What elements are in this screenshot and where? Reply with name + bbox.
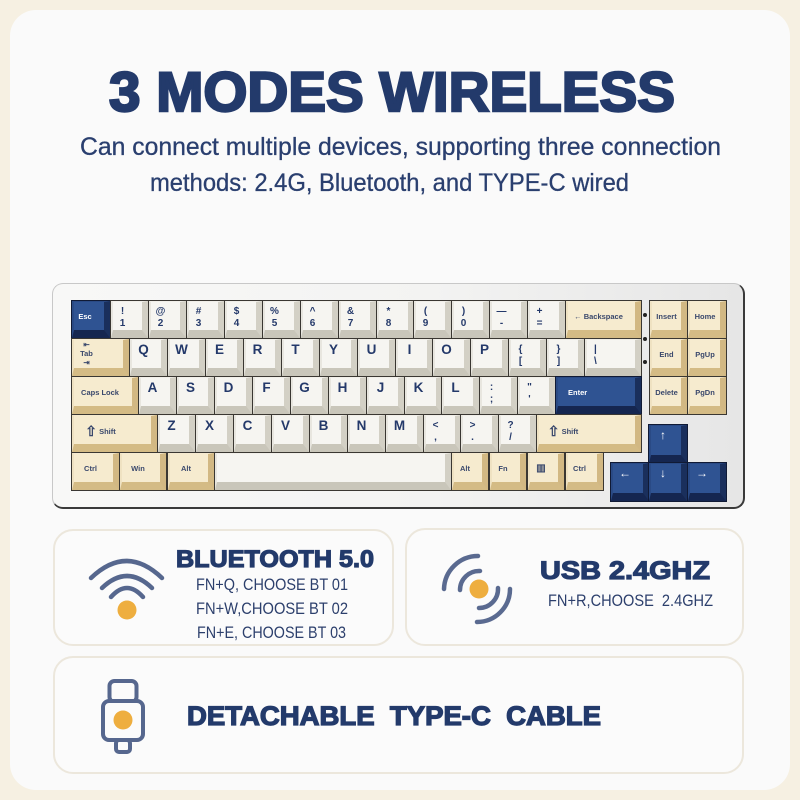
navigation key cluster: End	[659, 350, 674, 359]
key row: number row: %	[270, 306, 279, 317]
key row: ASDF: L	[451, 380, 460, 395]
key row: number row: $	[234, 306, 239, 317]
navigation key cluster	[649, 300, 727, 415]
key row: QWERTY: E	[215, 342, 224, 357]
arrow key cluster: →	[696, 466, 708, 480]
key row: ZXCV: >	[470, 420, 475, 431]
key row: number row: 6	[310, 318, 315, 329]
key row: ZXCV: /	[509, 432, 512, 443]
key row: ASDF: S	[186, 380, 195, 395]
subtitle text	[80, 133, 721, 197]
key row: number row: 8	[386, 318, 391, 329]
key row: number row: @	[156, 306, 165, 317]
Bluetooth text block: FN+Q, CHOOSE BT 01	[196, 575, 348, 594]
key row: QWERTY: R	[253, 342, 262, 357]
key row: number row: -	[500, 318, 503, 329]
key row: ZXCV	[71, 414, 642, 453]
key row: bottom row: Alt	[181, 464, 191, 473]
arrow key cluster: ↓	[660, 466, 666, 480]
key row: QWERTY: I	[408, 342, 411, 357]
key row: ZXCV: ?	[507, 420, 514, 431]
key row: number row	[71, 300, 642, 338]
key row: ASDF: A	[148, 380, 157, 395]
key row: ASDF: F	[262, 380, 271, 395]
arrow key cluster: ↑	[660, 428, 666, 442]
key row: number row: 1	[120, 318, 125, 329]
key row: ASDF: G	[299, 380, 310, 395]
key row: QWERTY: {	[519, 344, 522, 355]
key row: QWERTY: T	[291, 342, 300, 357]
key row: number row: #	[196, 306, 201, 317]
key row: ASDF: K	[414, 380, 423, 395]
navigation key cluster: Home	[695, 312, 715, 321]
key row: bottom row: Fn	[498, 464, 508, 473]
key row: number row: =	[537, 318, 542, 329]
USB text block	[540, 557, 713, 610]
key row: number row: 5	[272, 318, 277, 329]
key row: ZXCV: X	[205, 418, 214, 433]
key: Tab	[72, 339, 129, 376]
key row: ZXCV: <	[433, 420, 438, 431]
key row: bottom row: Alt	[460, 464, 470, 473]
arrow key cluster	[610, 424, 727, 502]
key row: number row: &	[347, 306, 354, 317]
key: space bar	[215, 453, 451, 490]
key row: QWERTY: U	[367, 342, 376, 357]
navigation key cluster: Insert	[656, 312, 677, 321]
navigation key cluster: Delete	[655, 388, 678, 397]
key row: number row: +	[537, 306, 542, 317]
key row: QWERTY	[71, 338, 642, 376]
key row: number row: (	[424, 306, 427, 317]
key row: bottom row: Ctrl	[84, 464, 97, 473]
icon: Type-C plug	[101, 679, 145, 754]
key row: QWERTY: [	[519, 356, 522, 367]
key: Esc: Esc	[78, 312, 92, 321]
key: Tab: ⇤	[83, 340, 90, 349]
USB text block: USB 2.4GHZ	[540, 557, 710, 585]
key row: ASDF: :	[490, 382, 493, 393]
key row: ASDF: Caps Lock	[81, 388, 119, 397]
Bluetooth text block: FN+E, CHOOSE BT 03	[197, 623, 346, 642]
key row: QWERTY: P	[480, 342, 489, 357]
key row: ZXCV: B	[319, 418, 328, 433]
key: Tab: Tab	[80, 349, 93, 358]
key row: ZXCV: N	[357, 418, 366, 433]
key row: number row: 9	[423, 318, 428, 329]
key row: number row: ← Backspace	[574, 312, 623, 321]
key row: QWERTY: ]	[557, 356, 560, 367]
panel: detachable Type-C cable	[53, 656, 744, 774]
icon: wifi signal	[88, 558, 164, 620]
navigation key cluster: PgUp	[695, 350, 715, 359]
key row: number row: !	[121, 306, 124, 317]
key row: number row: 2	[158, 318, 163, 329]
key row: bottom row: ▥	[536, 463, 546, 474]
Bluetooth text block: FN+W,CHOOSE BT 02	[196, 599, 348, 618]
key row: QWERTY: \	[594, 356, 597, 367]
arrow key cluster: ←	[619, 466, 631, 480]
key row: QWERTY: }	[557, 344, 560, 355]
subtitle text: Can connect multiple devices, supporting three connection	[80, 133, 721, 161]
key row: ZXCV: ⇧ Shift	[548, 423, 578, 439]
key row: ASDF: D	[224, 380, 233, 395]
key row: ZXCV: ⇧ Shift	[85, 423, 116, 439]
key row: bottom row: Win	[131, 464, 145, 473]
key row: QWERTY: W	[175, 342, 188, 357]
key row: ASDF: ;	[490, 394, 493, 405]
key row: number row: —	[496, 306, 506, 317]
key row: number row: 3	[196, 318, 201, 329]
key row: number row: 0	[461, 318, 466, 329]
navigation key cluster: PgDn	[695, 388, 715, 397]
Bluetooth text block: BLUETOOTH 5.0	[176, 546, 374, 573]
icon: radio signal	[442, 554, 512, 624]
key row: ASDF: "	[527, 382, 532, 393]
key: Enter: Enter	[568, 388, 587, 397]
key row: bottom row: Ctrl	[573, 464, 586, 473]
key row: number row: *	[387, 306, 390, 317]
key row: ASDF: J	[377, 380, 384, 395]
key row: bottom row	[71, 453, 604, 491]
keyboard	[52, 283, 745, 509]
key row: ASDF	[71, 376, 642, 414]
title: 3 MODES WIRELESS	[109, 60, 675, 123]
subtitle text: methods: 2.4G, Bluetooth, and TYPE-C wired	[150, 169, 629, 197]
panel: USB 2.4GHz	[405, 528, 744, 646]
cable heading: DETACHABLE TYPE-C CABLE	[187, 701, 601, 731]
key: Enter	[556, 377, 641, 414]
key row: number row: 7	[348, 318, 353, 329]
key row: ZXCV: M	[394, 418, 405, 433]
key: Esc	[72, 301, 110, 338]
key row: ASDF: H	[338, 380, 347, 395]
key row: ZXCV: .	[471, 432, 474, 443]
key row: ASDF: '	[528, 394, 531, 405]
indicator dots	[643, 313, 647, 364]
key row: ZXCV: V	[281, 418, 290, 433]
panel: Bluetooth 5.0	[53, 529, 394, 646]
key row: QWERTY: Q	[138, 342, 149, 357]
key row: QWERTY: |	[594, 344, 597, 355]
key row: number row: 4	[234, 318, 239, 329]
key row: ZXCV: ,	[434, 432, 437, 443]
Bluetooth text block	[176, 546, 374, 642]
key row: number row: ^	[310, 306, 315, 317]
key row: QWERTY: O	[441, 342, 452, 357]
key row: ZXCV: Z	[167, 418, 176, 433]
key row: number row: )	[462, 306, 465, 317]
key row: ZXCV: C	[243, 418, 252, 433]
key row: QWERTY: Y	[329, 342, 338, 357]
key: Tab: ⇥	[83, 358, 90, 367]
